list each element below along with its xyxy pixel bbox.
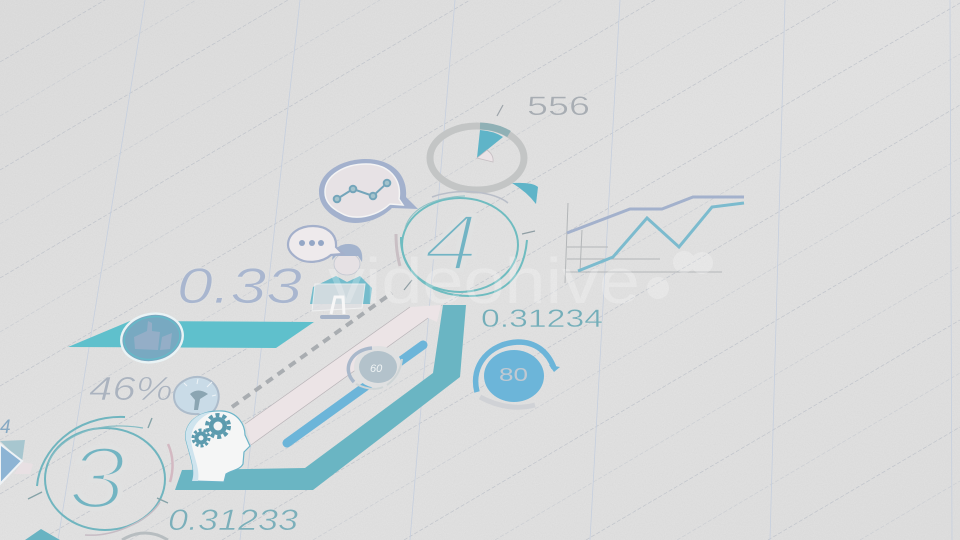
circled number 3: 3 — [68, 429, 126, 527]
slider: 60 — [370, 363, 383, 375]
icon: lightbulb bubble — [174, 377, 219, 420]
metric 556 — [497, 91, 590, 121]
metric 0.31233: 0.31233 — [168, 504, 298, 537]
partial metric 4: 4 — [0, 417, 11, 438]
partial bottom shape — [25, 529, 60, 540]
speech bubble chart — [319, 159, 418, 223]
metric 0.33: 0.33 — [177, 258, 302, 314]
watermark: videohive — [328, 245, 640, 317]
icon: head with gears — [186, 411, 250, 482]
circled number 4: 4 — [424, 197, 478, 287]
partial bottom arc — [122, 533, 168, 540]
dial 80: 80 — [499, 365, 528, 385]
metric 46%: 46% — [89, 370, 173, 407]
thick teal route — [175, 305, 466, 490]
connector band — [245, 305, 441, 445]
metric 556: 556 — [527, 91, 590, 121]
partial diamond icon — [0, 440, 33, 484]
icon: person at laptop — [310, 244, 372, 319]
teal parallelogram bar — [68, 321, 314, 348]
dial 80 — [476, 342, 560, 407]
speech bubble with dots — [288, 226, 343, 262]
slider — [287, 345, 423, 443]
circled number 3 — [28, 417, 173, 535]
metric 0.31234: 0.31234 — [481, 305, 603, 333]
dashed connector — [232, 293, 392, 407]
line chart — [565, 197, 744, 283]
circled number 4 — [396, 192, 535, 296]
icon: thumbs up — [117, 308, 187, 368]
gauge dial — [430, 126, 538, 204]
